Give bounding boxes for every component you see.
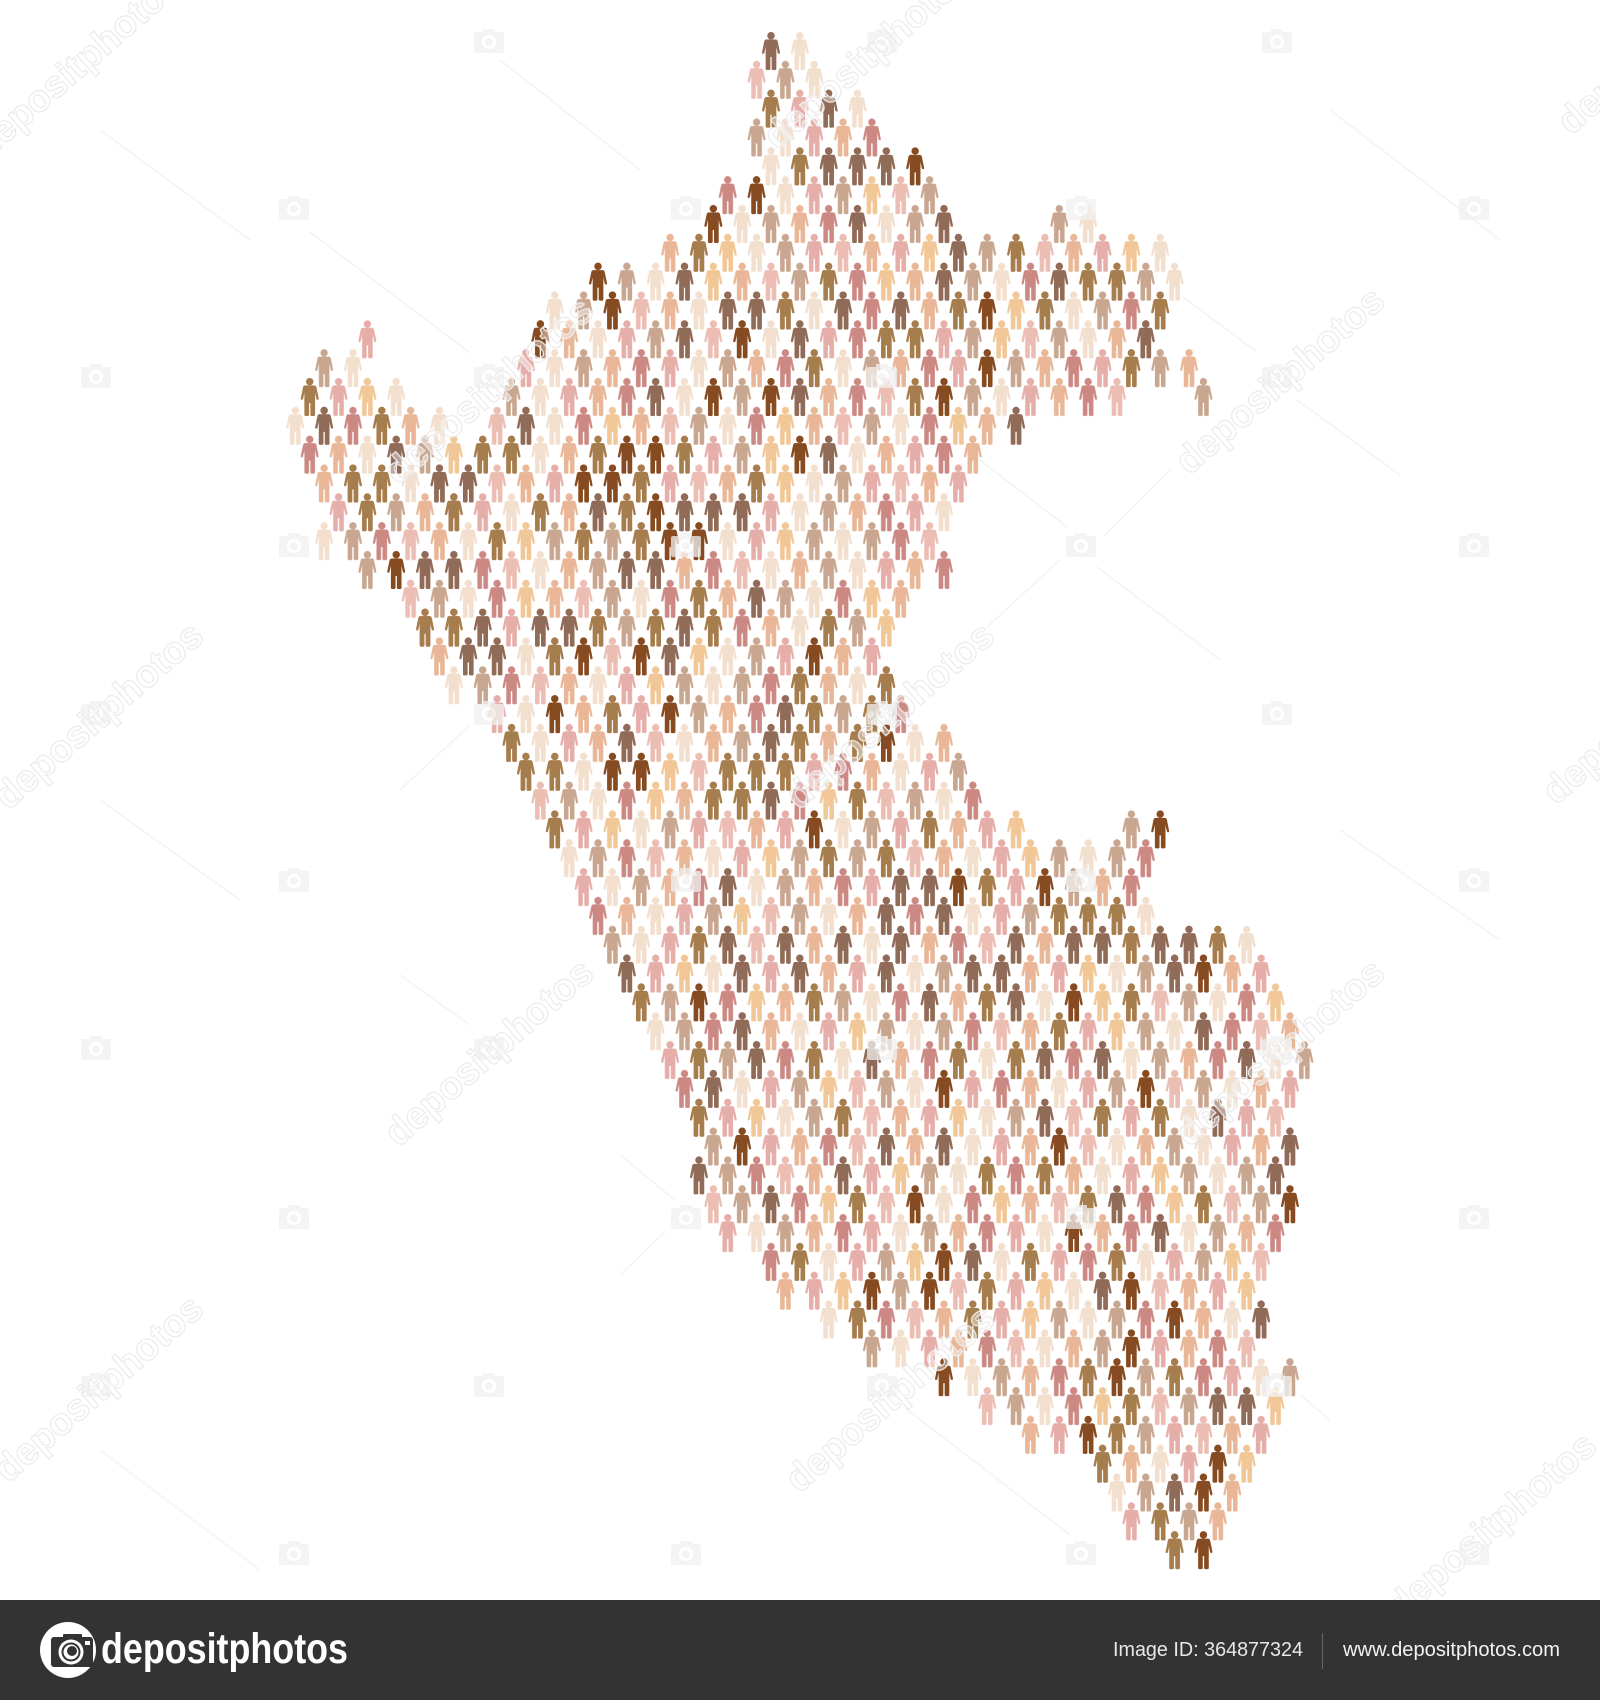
dark-brown figures bbox=[387, 147, 1299, 1569]
icon: depositphotos camera logo bbox=[40, 1622, 96, 1678]
logo wordmark: depositphotos bbox=[101, 1625, 348, 1673]
watermark: depositphotos text, cameras and guide lines: depositphotos bbox=[377, 289, 602, 493]
watermark: depositphotos text, cameras and guide lines: depositphotos bbox=[1168, 279, 1393, 483]
watermark: depositphotos text, cameras and guide lines: depositphotos bbox=[1168, 951, 1393, 1155]
image id: Image ID: 364877324 bbox=[1113, 1639, 1303, 1661]
map: Peru built from stick figures bbox=[281, 29, 1319, 1572]
watermark: depositphotos text, cameras and guide lines: depositphotos bbox=[377, 951, 602, 1155]
footer bar bbox=[0, 1600, 1600, 1700]
website url: www.depositphotos.com bbox=[1342, 1639, 1560, 1661]
mauve-brown figures bbox=[315, 32, 1299, 1511]
rows of light-toned figures bbox=[281, 29, 1319, 1572]
golden-brown figures bbox=[301, 90, 1227, 1569]
watermark: depositphotos text, cameras and guide lines: depositphotos bbox=[778, 614, 1003, 818]
watermark: depositphotos text, cameras and guide lines: depositphotos bbox=[1380, 1424, 1600, 1628]
watermark: depositphotos text, cameras and guide lines: depositphotos bbox=[778, 1297, 1003, 1501]
